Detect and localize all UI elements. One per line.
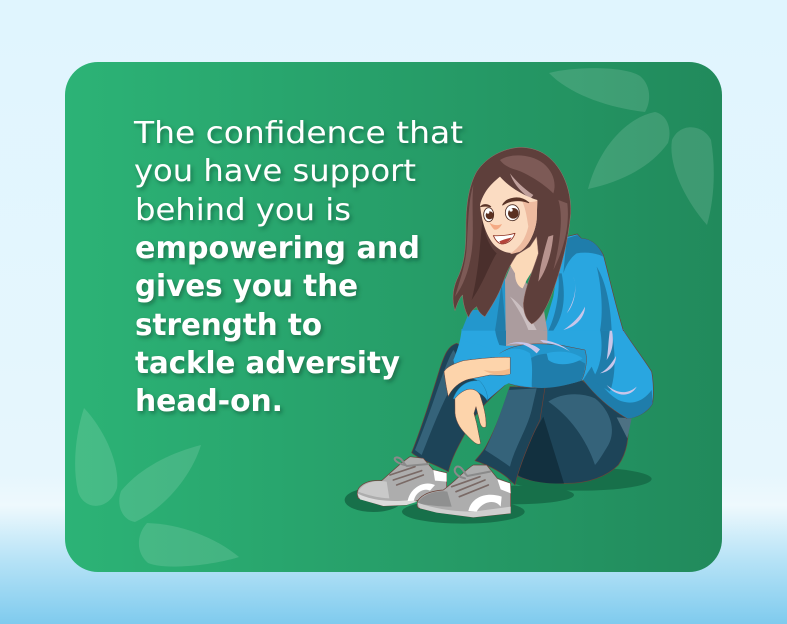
line: bold text 5: head-on. xyxy=(135,384,283,419)
line: regular text 3: behind you is xyxy=(135,193,351,228)
hanging hand xyxy=(455,389,486,444)
hair right highlight xyxy=(538,235,553,282)
hair top highlight xyxy=(500,155,555,193)
panel: green card xyxy=(65,62,722,572)
near shoe toe cap xyxy=(417,491,452,507)
face xyxy=(480,177,537,253)
right sleeve fold xyxy=(597,267,612,331)
eye: left xyxy=(484,208,494,222)
upper body and head xyxy=(453,147,623,331)
near shoe sole xyxy=(417,503,511,517)
near leg highlight xyxy=(415,350,458,455)
lower body and shoes xyxy=(345,329,653,524)
decorative leaves: bottom left xyxy=(75,408,239,567)
far shoe white stripe xyxy=(408,484,435,501)
far shoe xyxy=(357,457,447,506)
hair inner dark strands xyxy=(472,213,497,300)
hair xyxy=(453,147,571,324)
face shading xyxy=(510,200,537,254)
shirt hem xyxy=(505,329,547,346)
left hoodie fold xyxy=(495,329,506,346)
hoodie outline xyxy=(567,234,623,331)
ground shadows xyxy=(345,467,652,524)
line: bold text 3: strength to xyxy=(135,308,322,343)
left hoodie xyxy=(462,277,507,331)
grey shirt xyxy=(505,263,547,331)
hair left highlight xyxy=(455,185,473,297)
forearm shade xyxy=(483,368,510,375)
line: regular text 2: you have support xyxy=(134,154,416,189)
line: bold text 4: tackle adversity xyxy=(135,346,400,381)
sleeve cuff xyxy=(453,381,487,401)
sleeve arm xyxy=(500,344,586,388)
nose xyxy=(489,223,502,230)
left hoodie fold xyxy=(495,283,506,331)
seat grey band xyxy=(617,417,632,438)
near shoe upper xyxy=(417,465,511,517)
smile xyxy=(493,233,515,244)
lower sleeve xyxy=(453,340,508,400)
second leg highlight xyxy=(485,388,537,467)
cuff fold xyxy=(500,349,532,387)
resting forearm and hand xyxy=(444,357,510,397)
lavender lining xyxy=(507,340,570,353)
neck xyxy=(510,227,543,288)
thigh highlight xyxy=(548,394,612,465)
hoodie lavender highlights xyxy=(600,329,637,395)
far shoe heel xyxy=(433,470,447,482)
eyebrows xyxy=(481,198,529,207)
far shoe laces xyxy=(395,457,428,466)
hoodie side dark fold xyxy=(592,329,615,392)
line: bold text 1: empowering and xyxy=(135,231,420,266)
line: bold text 2: gives you the xyxy=(135,269,358,304)
decorative leaves: top right xyxy=(549,68,714,225)
hip dark underside xyxy=(516,417,564,483)
eye: right xyxy=(505,205,519,221)
hoodie lower dark fold xyxy=(583,367,653,418)
far shoe upper xyxy=(357,457,447,506)
far shoe toe xyxy=(358,481,389,498)
hoodie inner fold xyxy=(548,273,564,331)
illustration: seated girl in blue hoodie xyxy=(345,147,653,524)
hoodie body xyxy=(455,329,653,418)
hoodie outline xyxy=(583,330,653,418)
quote text xyxy=(133,116,463,419)
far shoe sole xyxy=(357,493,417,506)
near shoe xyxy=(417,465,511,517)
sleeve bright patch xyxy=(547,352,583,364)
near shoe heel xyxy=(497,479,511,493)
hip and far thigh xyxy=(515,380,628,483)
shirt light fold xyxy=(510,297,537,330)
mouth inner xyxy=(499,237,512,244)
near shoe laces xyxy=(455,466,490,478)
hoodie collar and shoulders xyxy=(543,234,623,331)
sleeve fold shade xyxy=(531,354,585,388)
hood shadow xyxy=(563,235,603,273)
line: regular text 1: The confidence that xyxy=(133,116,463,151)
lavender fold xyxy=(563,277,585,330)
near leg xyxy=(412,343,505,472)
near shoe white stripe xyxy=(468,495,502,512)
second leg xyxy=(475,387,545,485)
